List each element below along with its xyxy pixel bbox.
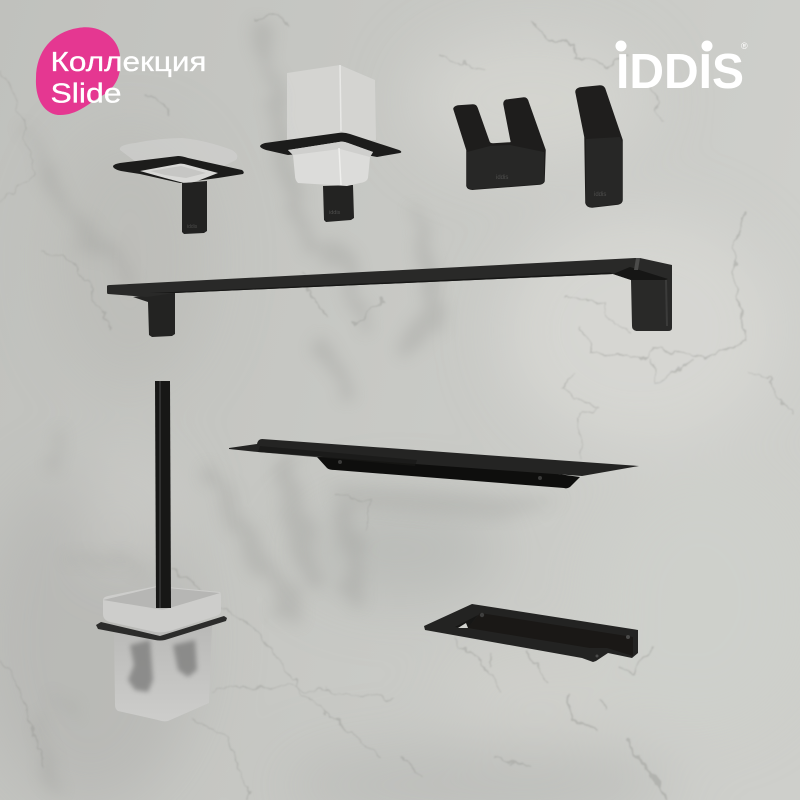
product: toilet paper holder	[424, 604, 638, 662]
black plate	[113, 156, 244, 183]
title: collection name: Коллекция	[50, 46, 206, 77]
title: Slide: Slide	[50, 78, 122, 108]
product: towel bar	[107, 258, 672, 337]
brush silhouette	[128, 640, 197, 692]
cut-out	[455, 615, 478, 628]
product: single hook	[576, 86, 622, 207]
product: double hook	[454, 98, 545, 189]
product: toilet brush holder	[96, 381, 227, 721]
lid	[103, 586, 221, 632]
underside	[317, 455, 580, 488]
product: single hook: iddis	[594, 192, 606, 198]
product: shelf	[229, 439, 639, 520]
broad soft veining	[23, 23, 432, 790]
brand logo: IDDIS: IDDIS	[616, 45, 744, 99]
upper glass	[287, 65, 376, 140]
top face	[229, 439, 639, 476]
inner recess	[468, 613, 633, 656]
right bracket inner	[613, 267, 668, 280]
brand logo: IDDIS: ®	[741, 41, 748, 51]
logo blob and collection title	[36, 27, 206, 115]
black plate	[260, 133, 401, 157]
wall mount	[323, 185, 354, 222]
pins	[480, 613, 484, 617]
wall mount	[182, 181, 207, 234]
product: tumbler	[260, 65, 401, 222]
handle	[155, 381, 171, 608]
holder body	[424, 604, 638, 662]
dish base inside plate	[140, 164, 218, 183]
bar lower edge	[150, 272, 613, 293]
frosted glass body	[114, 625, 212, 721]
pink blob	[36, 27, 120, 115]
product: soap dish	[113, 138, 244, 234]
frosted soap dish	[120, 138, 237, 170]
black plate	[96, 616, 227, 640]
product: soap dish: iddis	[187, 224, 198, 230]
shelf shadow	[330, 485, 565, 520]
left bracket	[133, 292, 175, 337]
lower glass	[288, 142, 373, 186]
product: double hook: iddis	[496, 175, 508, 181]
bar	[107, 258, 672, 331]
product: tumbler: iddis	[329, 210, 341, 216]
